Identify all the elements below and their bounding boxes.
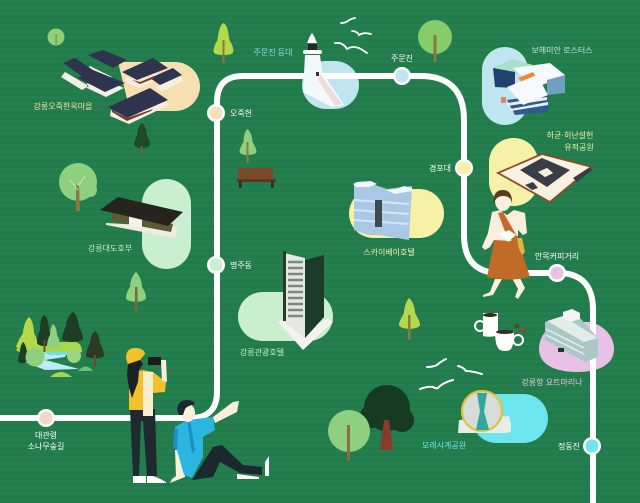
label: 허균 허난설헌 유적공원: 허균·허난설헌: [547, 130, 593, 140]
icon: birds bottom: [420, 359, 482, 389]
icon: birds top: [335, 18, 371, 53]
icon: round tree left: [59, 163, 97, 211]
label: 허균 허난설헌 유적공원: 유적공원: [564, 142, 594, 152]
label: 모래시계공원: 모래시계공원: [422, 440, 466, 450]
stop: 명주동: 명주동: [230, 260, 252, 270]
icon: yellow tree top: [214, 23, 234, 63]
stop: 대관령 소나무숲길: [28, 409, 64, 451]
stop: 대관령 소나무숲길: 소나무숲길: [28, 442, 64, 451]
blob: bohemian: [482, 47, 528, 125]
building: sky bay hotel: [353, 181, 412, 240]
stop: 안목커피거리: [535, 251, 579, 282]
label: 강릉대도호부: 강릉대도호부: [88, 243, 132, 253]
building: hanok village: [61, 50, 183, 124]
label: 스카이베이호텔: 스카이베이호텔: [363, 247, 415, 257]
label: 허균 허난설헌 유적공원: [547, 130, 594, 152]
stop: 정동진: [558, 437, 601, 455]
icon: tree near bench: [240, 129, 256, 163]
character: woman in dress: [482, 190, 530, 299]
icon: tree top right: [418, 20, 452, 62]
stop: 오죽헌: [207, 104, 252, 122]
stop: 대관령 소나무숲길: 대관령: [35, 430, 57, 440]
stop: 명주동: [207, 256, 252, 274]
building: marina: [545, 309, 598, 362]
route line: [0, 76, 593, 503]
label: 강릉오죽한옥마을: 강릉오죽한옥마을: [34, 101, 92, 111]
icon: dark pine: [134, 123, 150, 155]
stop: 주문진: 주문진: [391, 53, 413, 63]
icon: yellow tree bottom: [399, 298, 420, 340]
building: daedohobu: [100, 197, 183, 238]
building: lighthouse: [303, 33, 344, 107]
building: tourist hotel: [278, 251, 333, 350]
icon: green tree middle: [126, 272, 146, 312]
blob: hanok village: [118, 62, 200, 111]
blob: daedohobu: [142, 179, 191, 269]
character: woman with camera: [126, 348, 167, 483]
blob: gangneung tourist hotel: [238, 292, 333, 341]
blob: heo park: [489, 138, 538, 206]
label: 강릉항 요트마리나: 강릉항 요트마리나: [521, 377, 583, 387]
building: sand clock: [458, 391, 511, 433]
icon: bench: [237, 168, 276, 188]
icon: small round tree: [48, 28, 64, 46]
stop: 안목커피거리: 안목커피거리: [535, 251, 579, 261]
blob: sky bay: [349, 189, 444, 238]
icon: forest cluster: [16, 312, 104, 377]
label: 보헤미안 로스터스: 보헤미안 로스터스: [531, 45, 593, 55]
stop: 경포대: [429, 159, 473, 177]
blob: lighthouse: [302, 61, 359, 109]
building: bohemian roastery: [493, 59, 565, 115]
stop: 주문진: [391, 53, 413, 85]
stop: 오죽헌: 오죽헌: [230, 109, 252, 118]
character: man sitting: [170, 400, 269, 483]
stop: 정동진: 정동진: [558, 441, 580, 451]
blob: marina: [539, 322, 614, 372]
label: 강릉관광호텔: 강릉관광호텔: [240, 347, 284, 357]
icon: coffee cups: [475, 313, 526, 351]
building: heo gyun park: [498, 154, 592, 202]
icon: tree pair bottom: [328, 385, 414, 461]
blob: sand clock park: [472, 394, 548, 443]
label: 주문진 등대: 주문진 등대: [253, 47, 293, 57]
stop: 경포대: 경포대: [429, 163, 451, 173]
